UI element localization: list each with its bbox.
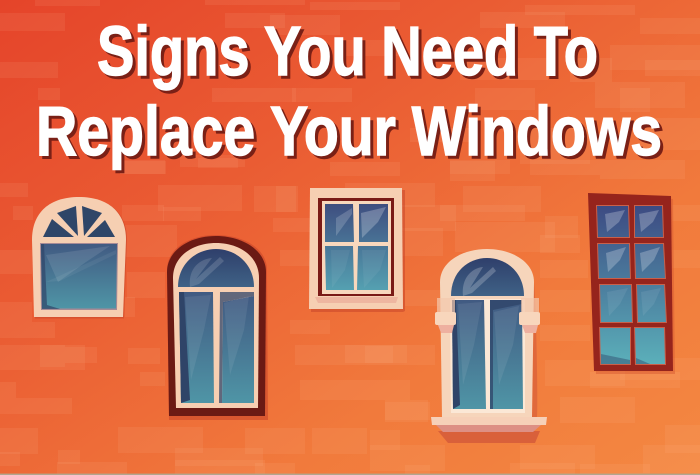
window 1: fan-light arched window [32,197,127,318]
window sill [431,417,547,432]
window 5: tall red eight-pane window [588,193,675,374]
window 3: square four-pane window [309,188,405,312]
right capital [519,298,540,333]
window 2: dark red arched double window [167,235,268,420]
window 4: ornate arched window with sill [431,249,547,443]
left capital [435,298,456,333]
title [36,12,665,173]
